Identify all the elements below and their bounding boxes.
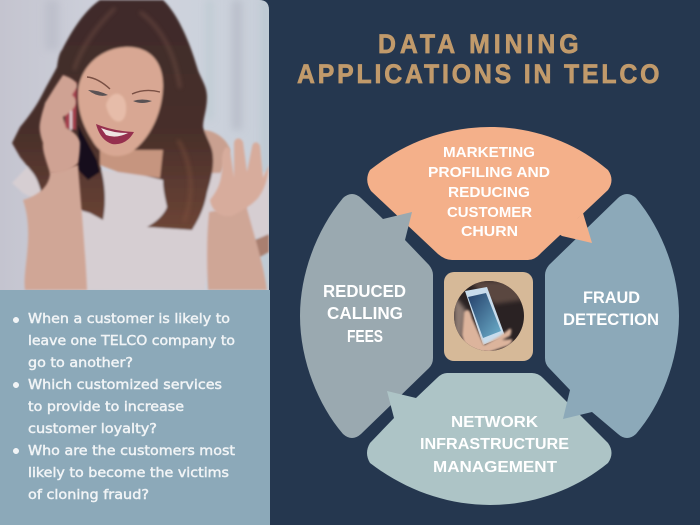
segment: fraud detection	[545, 194, 679, 438]
photo: woman on the phone	[0, 0, 269, 290]
label: CHURN	[461, 223, 518, 240]
hand at ear	[40, 75, 80, 173]
label: REDUCING	[448, 184, 530, 201]
raised hand	[210, 138, 269, 216]
dark hair shadow	[78, 125, 100, 180]
hand	[462, 310, 512, 352]
label: INFRASTRUCTURE	[420, 436, 569, 453]
hair	[12, 0, 213, 230]
hair highlights	[74, 8, 180, 88]
label: CALLING	[327, 303, 403, 323]
segment: reduced calling fees	[300, 194, 433, 438]
right arm	[207, 205, 267, 290]
bullet list: Who are the customers most	[28, 444, 235, 459]
face	[78, 47, 163, 156]
label	[323, 281, 406, 346]
label	[563, 288, 659, 329]
bullet list: of cloning fraud?	[28, 488, 149, 503]
segment: network infrastructure	[367, 373, 612, 505]
center tile with phone photo	[444, 272, 533, 361]
label: REDUCED	[323, 281, 406, 301]
phone	[65, 80, 77, 130]
bullet list: When a customer is likely to	[28, 312, 230, 327]
label: MARKETING	[443, 144, 535, 161]
arrow: marketing tail	[556, 213, 592, 243]
bullet list: likely to become the victims	[28, 466, 229, 481]
label: MANAGEMENT	[433, 459, 557, 476]
brows and eyes	[87, 77, 110, 89]
left arm	[23, 165, 87, 290]
bullet list: to provide to increase	[28, 400, 184, 415]
bullet list	[13, 312, 235, 503]
bullet list: customer loyalty?	[28, 422, 157, 437]
bullet list: Which customized services	[28, 378, 222, 393]
label: DETECTION	[563, 310, 659, 329]
segment: marketing profiling	[367, 127, 612, 260]
shoulder	[203, 129, 231, 174]
mouth	[96, 124, 134, 144]
label: FRAUD	[583, 288, 640, 307]
label	[428, 144, 550, 240]
bullet list: go to another?	[28, 356, 133, 371]
bullet list: leave one TELCO company to	[28, 334, 235, 349]
label	[420, 414, 569, 476]
shirt	[13, 165, 269, 290]
label: FEES	[347, 326, 383, 346]
label: NETWORK	[451, 414, 538, 431]
label: PROFILING AND	[428, 164, 550, 181]
panel: questions	[0, 290, 270, 525]
title	[297, 30, 659, 89]
neck	[100, 150, 163, 178]
phone	[465, 287, 505, 345]
title: DATA MINING	[378, 30, 579, 59]
title: APPLICATIONS IN TELCO	[297, 60, 659, 89]
label: CUSTOMER	[447, 204, 532, 221]
